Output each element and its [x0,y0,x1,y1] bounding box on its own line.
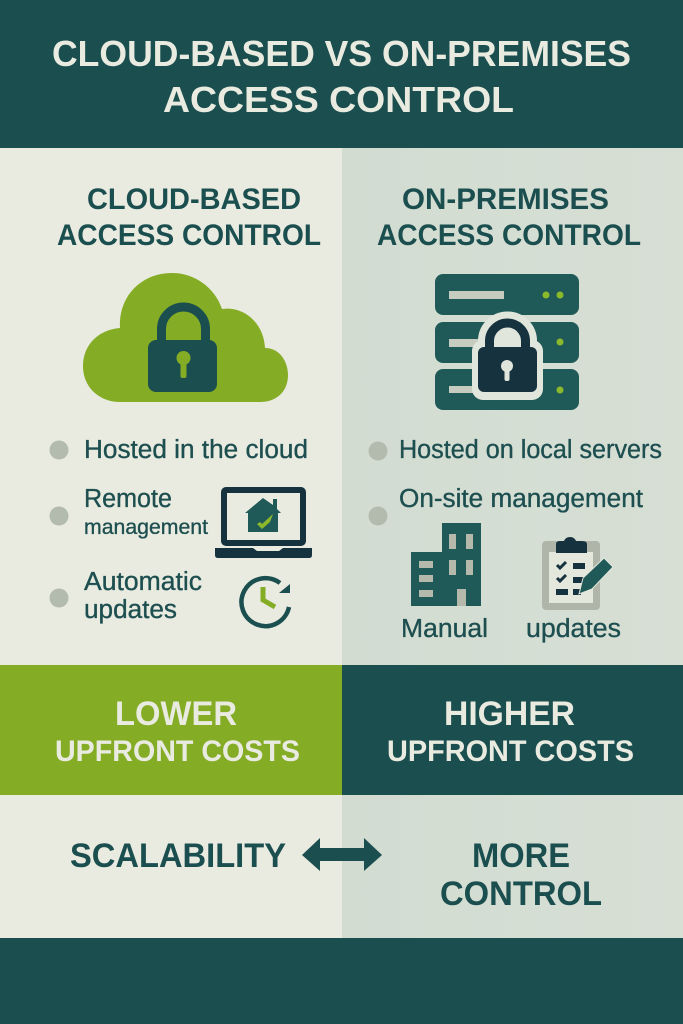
bullet list: on-premises [368,436,662,526]
label: more control: MORE [472,837,570,875]
label: more control: CONTROL [440,875,602,913]
icon: clock with refresh arrow [242,578,290,626]
heading: cloud-based: ACCESS CONTROL [57,219,321,252]
icon: server rack with padlock [435,274,579,410]
footer band [0,938,683,1024]
panel: lower upfront costs [0,665,342,795]
panel: lower upfront costs: LOWER [115,695,237,733]
bullet list: on-premises: On-site management [399,485,643,513]
icon: cloud with padlock [83,273,288,402]
label: scalability: SCALABILITY [70,837,286,875]
bullet list: cloud-based: Hosted in the cloud [84,436,308,464]
icon: laptop with house [215,490,312,558]
panel: higher upfront costs: HIGHER [444,695,575,733]
title banner [0,0,683,148]
panel: right background [342,148,683,938]
title banner: ACCESS CONTROL [163,79,514,120]
heading: cloud-based: CLOUD-BASED [87,183,301,216]
panel: higher upfront costs [342,665,683,795]
bullet list: cloud-based: Automatic [84,568,202,596]
heading: on-premises: ACCESS CONTROL [377,219,641,252]
icon: office building [411,523,481,606]
heading: on-premises [377,183,641,252]
title banner: CLOUD-BASED VS ON-PREMISES [52,33,631,74]
bullet list: cloud-based [50,436,308,624]
label: updates: updates [526,615,621,643]
bullet list: cloud-based: Remote [84,485,172,513]
bullet list: on-premises: Hosted on local servers [399,436,662,464]
label: more control [440,837,602,913]
label: manual: Manual [401,615,488,643]
bullet list: cloud-based: management [84,516,208,539]
arrow: double-headed [302,838,382,871]
heading: cloud-based [57,183,321,252]
panel: lower upfront costs: UPFRONT COSTS [55,735,300,768]
icon: clipboard checklist [542,537,613,610]
bullet list: cloud-based: updates [84,596,177,624]
panel: higher upfront costs: UPFRONT COSTS [387,735,634,768]
heading: on-premises: ON-PREMISES [402,183,609,216]
